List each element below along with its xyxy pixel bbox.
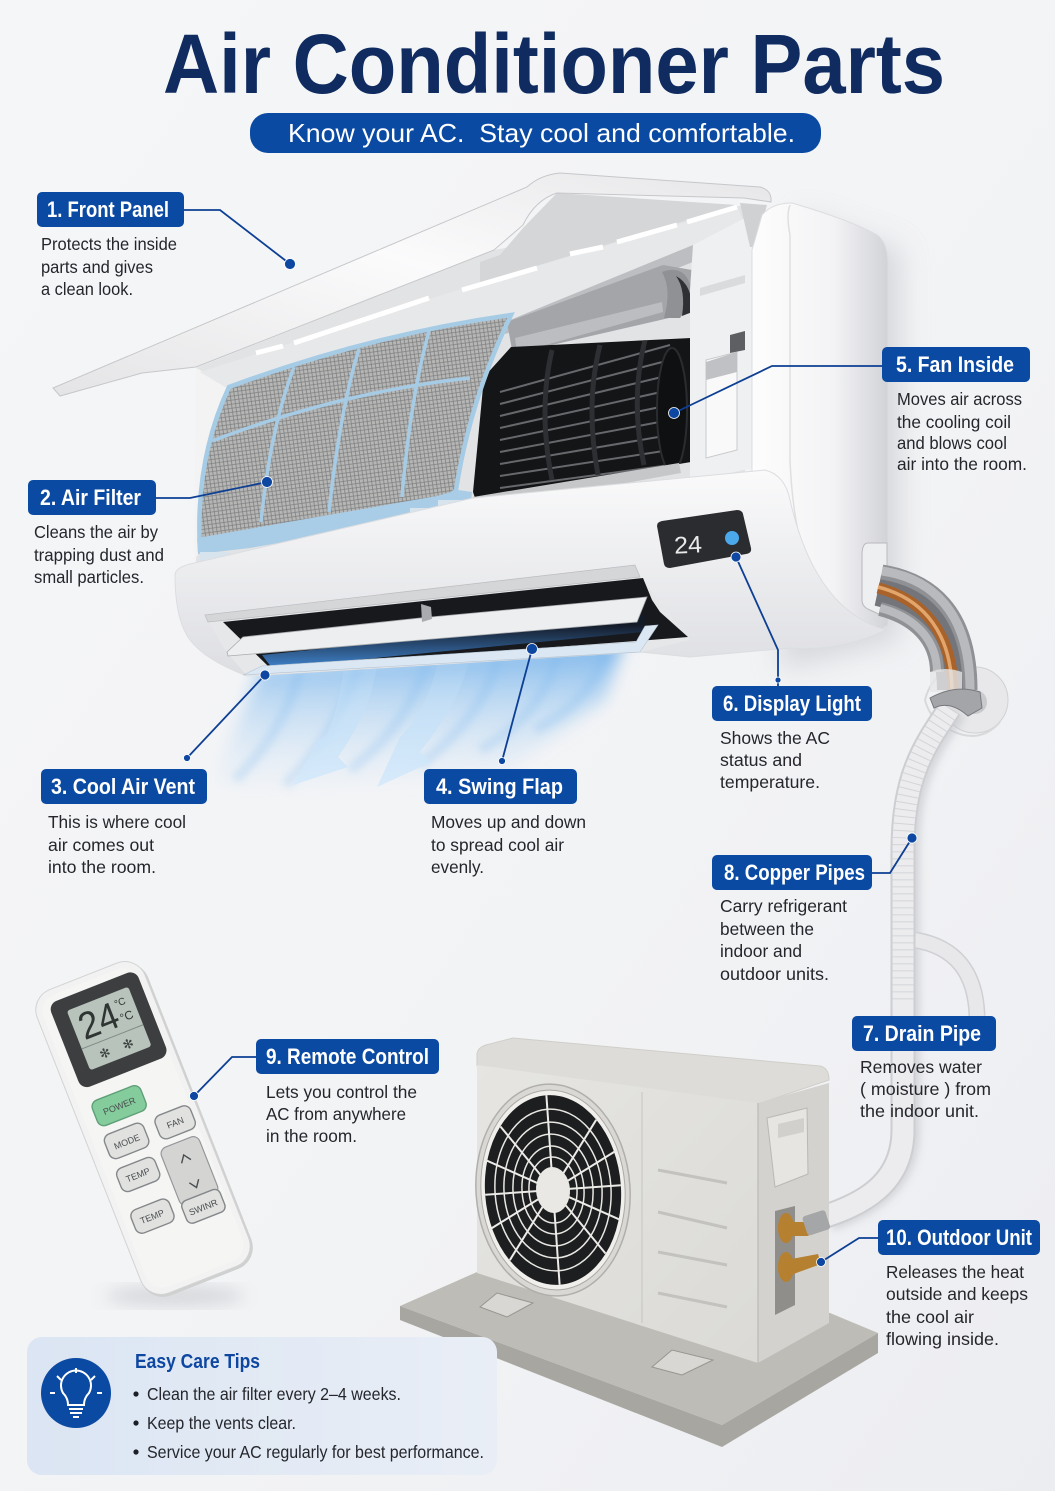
gap below flap with blue air xyxy=(262,615,645,668)
callout 2: Air Filter: Cleans the air by xyxy=(34,522,158,542)
callout 2: Air Filter xyxy=(28,476,272,587)
concrete base xyxy=(400,1306,878,1447)
callout 9: Remote Control xyxy=(190,1039,439,1146)
mounting foot left xyxy=(480,1293,533,1317)
right column xyxy=(690,218,752,482)
lower sleeve xyxy=(880,609,937,672)
subtitle banner xyxy=(250,113,821,153)
subtitle banner: Know your AC. Stay cool and comfortable. xyxy=(288,118,795,148)
valve recess xyxy=(775,1206,795,1315)
upper sleeve xyxy=(882,572,970,690)
left cavity wall xyxy=(194,368,230,562)
pipe cover notch xyxy=(862,543,887,618)
callout 8: Copper Pipes: outdoor units. xyxy=(720,964,829,984)
swing button xyxy=(180,1188,227,1225)
pipe gap backing xyxy=(878,590,953,690)
callout 2: Air Filter: 2. Air Filter xyxy=(40,485,141,510)
callout 1: Front Panel xyxy=(37,192,296,299)
fan xyxy=(473,338,691,498)
illustration: pipes and wall connection xyxy=(823,571,1008,1222)
pipe clamp xyxy=(930,689,982,716)
callout 6: Display Light: Shows the AC xyxy=(720,728,830,748)
callout 9: Remote Control: Lets you control the xyxy=(266,1082,417,1102)
arrow: left air arrow xyxy=(293,655,378,785)
callout 5: Fan Inside: 5. Fan Inside xyxy=(896,352,1014,377)
temp button: TEMP xyxy=(124,1166,151,1184)
callout 3: Cool Air Vent: 3. Cool Air Vent xyxy=(51,774,196,799)
callout 7: Drain Pipe xyxy=(852,1016,996,1121)
hose collar xyxy=(802,1210,831,1236)
tips list: Clean the air filter every 2–4 weeks. xyxy=(147,1384,401,1404)
callout 5: Fan Inside xyxy=(668,347,1030,474)
callout 7: Drain Pipe: Removes water xyxy=(860,1057,982,1077)
unit top xyxy=(477,1038,829,1104)
hinge xyxy=(740,203,767,247)
inner cavity xyxy=(196,205,745,565)
callout 5: Fan Inside: Moves air across xyxy=(897,389,1022,409)
fan grille xyxy=(469,1079,637,1301)
callout 6: Display Light xyxy=(712,552,872,792)
unit side xyxy=(758,1083,829,1363)
illustration: indoor AC unit xyxy=(53,173,900,676)
temp button lower xyxy=(129,1197,176,1235)
fan button xyxy=(153,1104,197,1141)
callout 2: Air Filter: small particles. xyxy=(34,567,144,587)
callout 4: Swing Flap: Moves up and down xyxy=(431,812,586,832)
callout 6: Display Light: 6. Display Light xyxy=(723,691,862,716)
power button xyxy=(90,1084,148,1128)
right end cap xyxy=(752,203,888,648)
callout 3: Cool Air Vent xyxy=(41,670,270,877)
callout 9: Remote Control: in the room. xyxy=(266,1126,357,1146)
lid underside xyxy=(480,193,737,283)
callout 1: Front Panel: 1. Front Panel xyxy=(47,197,169,222)
callout 5: Fan Inside: the cooling coil xyxy=(897,412,1011,432)
display panel xyxy=(657,510,751,568)
callout 10: Outdoor Unit: flowing inside. xyxy=(886,1329,999,1349)
callout 7: Drain Pipe: ( moisture ) from xyxy=(860,1079,991,1099)
lid light strips xyxy=(256,207,737,353)
swing button: SWINR xyxy=(188,1197,220,1218)
callout 10: Outdoor Unit xyxy=(816,1220,1040,1349)
callout 10: Outdoor Unit: 10. Outdoor Unit xyxy=(886,1225,1033,1250)
remote screen: ✻ xyxy=(120,1035,136,1053)
shelf below strips xyxy=(200,207,745,390)
callout 7: Drain Pipe: 7. Drain Pipe xyxy=(863,1021,981,1046)
tips heading: Easy Care Tips xyxy=(135,1350,260,1373)
title: Air Conditioner Parts xyxy=(163,17,945,111)
callout 6: Display Light: status and xyxy=(720,750,802,770)
callout 8: Copper Pipes: Carry refrigerant xyxy=(720,896,847,916)
callout 5: Fan Inside: and blows cool xyxy=(897,433,1007,453)
illustration: remote control xyxy=(29,954,260,1306)
display panel: 24 xyxy=(673,531,703,560)
tips list: Service your AC regularly for best performance. xyxy=(147,1442,484,1462)
fan button: FAN xyxy=(165,1115,185,1131)
power button: POWER xyxy=(102,1095,137,1117)
white collar xyxy=(930,669,962,692)
arrow: right air arrow xyxy=(377,645,472,787)
motor housing xyxy=(507,265,695,353)
drain hose xyxy=(823,708,950,1217)
callout 7: Drain Pipe: the indoor unit. xyxy=(860,1101,979,1121)
callout 1: Front Panel: parts and gives xyxy=(41,257,153,277)
callout 8: Copper Pipes: indoor and xyxy=(720,941,802,961)
callout 10: Outdoor Unit: Releases the heat xyxy=(886,1262,1024,1282)
remote screen: °C xyxy=(118,1007,136,1025)
icon: light bulb xyxy=(41,1358,111,1428)
callout 9: Remote Control: AC from anywhere xyxy=(266,1104,406,1124)
illustration: cool air flow xyxy=(212,640,625,800)
illustration: outdoor unit xyxy=(400,1038,878,1447)
swing flap xyxy=(227,597,647,656)
mode button: MODE xyxy=(113,1132,141,1151)
panel: easy care tips xyxy=(27,1337,497,1475)
unit front xyxy=(477,1065,758,1363)
callout 3: Cool Air Vent: into the room. xyxy=(48,857,156,877)
front lid xyxy=(53,173,771,396)
callout 5: Fan Inside: air into the room. xyxy=(897,454,1027,474)
temp button xyxy=(115,1155,162,1194)
tips list xyxy=(133,1384,484,1462)
mounting foot right xyxy=(652,1350,713,1375)
remote screen xyxy=(48,970,169,1090)
callout 8: Copper Pipes: between the xyxy=(720,919,814,939)
callout 9: Remote Control: 9. Remote Control xyxy=(266,1044,429,1069)
callout 4: Swing Flap: to spread cool air xyxy=(431,835,564,855)
wall ring xyxy=(942,667,1008,733)
lower body xyxy=(175,470,886,676)
callout 2: Air Filter: trapping dust and xyxy=(34,545,164,565)
shelf under fan xyxy=(473,463,681,510)
callout 4: Swing Flap: evenly. xyxy=(431,857,484,877)
wall shadow xyxy=(780,215,900,670)
remote screen: 24 xyxy=(73,995,125,1049)
tips list: Keep the vents clear. xyxy=(147,1413,296,1433)
copper pipe xyxy=(878,588,953,692)
callout 4: Swing Flap xyxy=(424,644,586,877)
callout 1: Front Panel: Protects the inside xyxy=(41,234,177,254)
side service cover xyxy=(767,1108,808,1187)
callout 3: Cool Air Vent: This is where cool xyxy=(48,812,186,832)
callout 8: Copper Pipes: 8. Copper Pipes xyxy=(724,860,865,885)
vent opening xyxy=(205,565,690,676)
callout 8: Copper Pipes xyxy=(712,833,917,984)
temp button lower: TEMP xyxy=(139,1208,166,1226)
remote screen: °C xyxy=(113,996,128,1010)
hose shadow xyxy=(830,712,958,1222)
air filter xyxy=(197,315,511,562)
remote screen: ✻ xyxy=(97,1044,113,1062)
brass valves xyxy=(778,1213,821,1282)
callout 6: Display Light: temperature. xyxy=(720,772,820,792)
small drain branch xyxy=(915,940,977,1016)
mode button xyxy=(102,1121,151,1161)
louvers xyxy=(658,1170,727,1307)
callout 3: Cool Air Vent: air comes out xyxy=(48,835,154,855)
callout 10: Outdoor Unit: the cool air xyxy=(886,1307,974,1327)
callout 10: Outdoor Unit: outside and keeps xyxy=(886,1284,1028,1304)
callout 1: Front Panel: a clean look. xyxy=(41,279,133,299)
callout 4: Swing Flap: 4. Swing Flap xyxy=(436,774,563,799)
lower lip xyxy=(243,625,658,675)
rocker up down xyxy=(159,1135,220,1207)
